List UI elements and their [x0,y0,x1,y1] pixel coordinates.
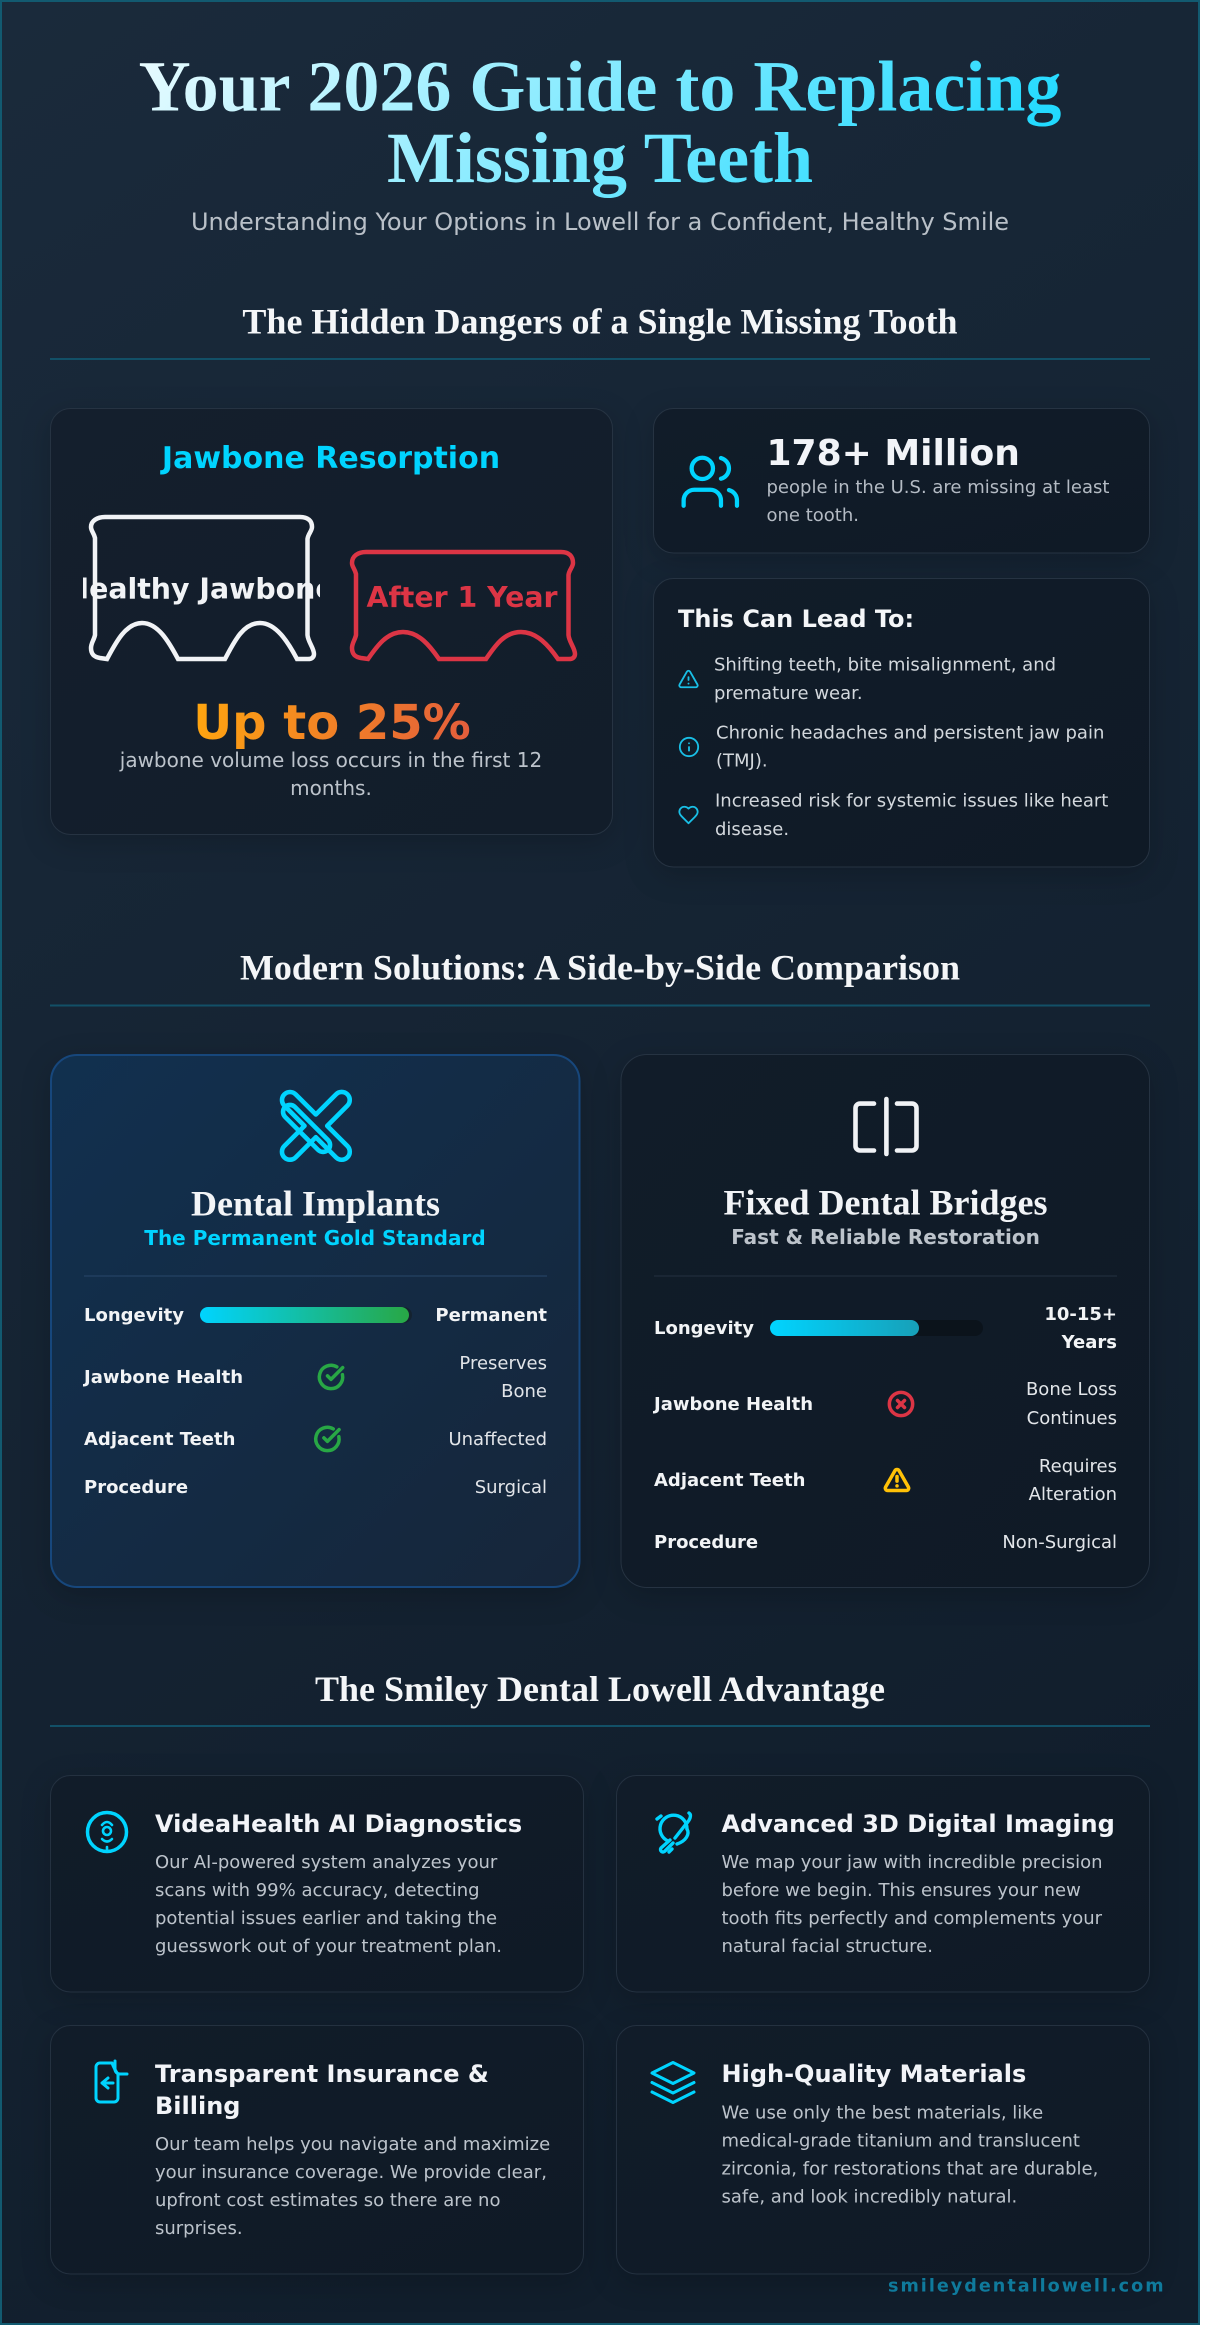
row: longevity: Permanent [435,1305,547,1326]
row: adjacent teeth: Unaffected [448,1429,547,1450]
card text: We map your jaw with incredible precision [722,1852,1103,1873]
row: longevity: Longevity [84,1305,184,1326]
stat text: one tooth. [766,505,859,526]
row: longevity: Longevity [654,1318,754,1339]
panel: 178+ million stat [654,408,1150,553]
row: jawbone health: Jawbone Health [82,1367,243,1388]
diagram: healthy jawbone [65,517,335,659]
row: jawbone health: Bone [501,1381,547,1402]
row: jawbone health: Jawbone Health [652,1394,813,1415]
title: Your 2026 Guide to Replacing [139,46,1061,126]
stat: up to 25%: Up to 25% [193,695,471,751]
row: procedure: Non-Surgical [1002,1532,1117,1553]
card title: VideaHealth AI Diagnostics [155,1810,522,1838]
row: adjacent teeth [84,1427,547,1451]
icon: people [684,458,737,506]
icon: ai scan [88,1812,126,1852]
list item: systemic risk: disease. [715,819,789,840]
row: longevity [654,1304,1117,1353]
row: adjacent teeth: Adjacent Teeth [654,1470,805,1491]
card subtitle: Fast & Reliable Restoration [731,1225,1040,1249]
panel: 3d imaging [616,1776,1150,1992]
icon: layers [652,2062,694,2102]
list item: headaches: Chronic headaches and persistent jaw pain [716,723,1104,744]
row: procedure: Procedure [654,1532,758,1553]
card text: scans with 99% accuracy, detecting [155,1880,480,1901]
card text: guesswork out of your treatment plan. [155,1936,502,1957]
card title: Transparent Insurance & [155,2060,489,2088]
icon: implant [280,1092,350,1160]
stat text: people in the U.S. are missing at least [766,477,1109,498]
card title: Fixed Dental Bridges [724,1182,1047,1222]
card text: tooth fits perfectly and complements your [722,1908,1103,1929]
stat number: 178+ Million [766,433,1020,474]
card text: Our team helps you navigate and maximize [155,2134,550,2155]
panel heading: Jawbone Resorption [160,441,500,476]
icon: bridge [856,1099,916,1154]
panel: fixed dental bridges [621,1054,1150,1588]
list item: systemic risk: Increased risk for systemic issues like heart [715,791,1108,812]
panel: dental implants [51,1055,580,1587]
row: jawbone health [652,1379,1117,1429]
card title: High-Quality Materials [722,2060,1026,2088]
row: procedure: Procedure [84,1477,188,1498]
card text: Our AI-powered system analyzes your [155,1852,498,1873]
card text: zirconia, for restorations that are durable, [722,2158,1098,2180]
card text: upfront cost estimates so there are no [155,2190,500,2211]
list item: shifting teeth: premature wear. [714,683,863,704]
row: adjacent teeth: Alteration [1029,1484,1117,1505]
card text: before we begin. This ensures your new [722,1880,1081,1901]
row: jawbone health [82,1353,547,1402]
list item: shifting teeth [679,655,1056,704]
row: adjacent teeth: Adjacent Teeth [84,1429,235,1450]
panel: jawbone resorption [50,408,612,834]
subtitle: Understanding Your Options in Lowell for a Confident, Healthy Smile [191,208,1009,236]
list item: headaches: (TMJ). [716,751,768,772]
row: jawbone health: Preserves [459,1353,547,1374]
list item: headaches [680,723,1104,772]
panel: insurance and billing [50,2026,584,2274]
heading: modern solutions: Modern Solutions: A Side-by-Side Comparison [240,948,960,988]
card title: Dental Implants [191,1184,440,1224]
footer url: smileydentallowell.com [888,2276,1166,2296]
card text: surprises. [155,2218,243,2239]
title: Missing Teeth [387,118,813,198]
row: jawbone health: Bone Loss [1026,1379,1117,1400]
icon: billing document [96,2061,127,2102]
row: adjacent teeth [654,1456,1117,1505]
list item: shifting teeth: Shifting teeth, bite misalignment, and [714,655,1056,676]
heading: smiley dental advantage: The Smiley Dental Lowell Advantage [315,1669,885,1709]
card text: safe, and look incredibly natural. [722,2186,1017,2208]
heading: hidden dangers: The Hidden Dangers of a Single Missing Tooth [242,302,958,342]
row: procedure [84,1477,547,1498]
row: longevity [84,1305,547,1326]
diagram: jawbone after one year: After 1 Year [366,581,558,614]
diagram: healthy jawbone: Healthy Jawbone [65,573,335,606]
row: procedure: Surgical [475,1477,547,1498]
card text: We use only the best materials, like [722,2102,1043,2124]
row: procedure [654,1532,1117,1553]
row: longevity: Years [1061,1332,1117,1353]
panel: materials [616,2026,1150,2274]
icon: 3d imaging [657,1813,690,1852]
stat description: jawbone volume loss occurs in the first 12 [119,748,542,772]
panel heading: This Can Lead To: [678,605,914,633]
row: adjacent teeth: Requires [1039,1456,1117,1477]
card subtitle: The Permanent Gold Standard [144,1226,486,1250]
stat description: months. [290,776,372,800]
card text: medical-grade titanium and translucent [722,2130,1080,2152]
panel: videahealth ai [50,1776,584,1992]
list item: systemic risk [679,791,1108,840]
card text: your insurance coverage. We provide clear, [155,2162,547,2183]
card text: potential issues earlier and taking the [155,1908,497,1929]
panel: this can lead to [654,578,1150,867]
card text: natural facial structure. [722,1936,933,1957]
diagram: jawbone after one year [352,552,575,659]
row: jawbone health: Continues [1027,1408,1117,1429]
row: longevity: 10-15+ [1044,1304,1117,1325]
card title: Billing [155,2092,240,2120]
card title: Advanced 3D Digital Imaging [722,1810,1115,1838]
